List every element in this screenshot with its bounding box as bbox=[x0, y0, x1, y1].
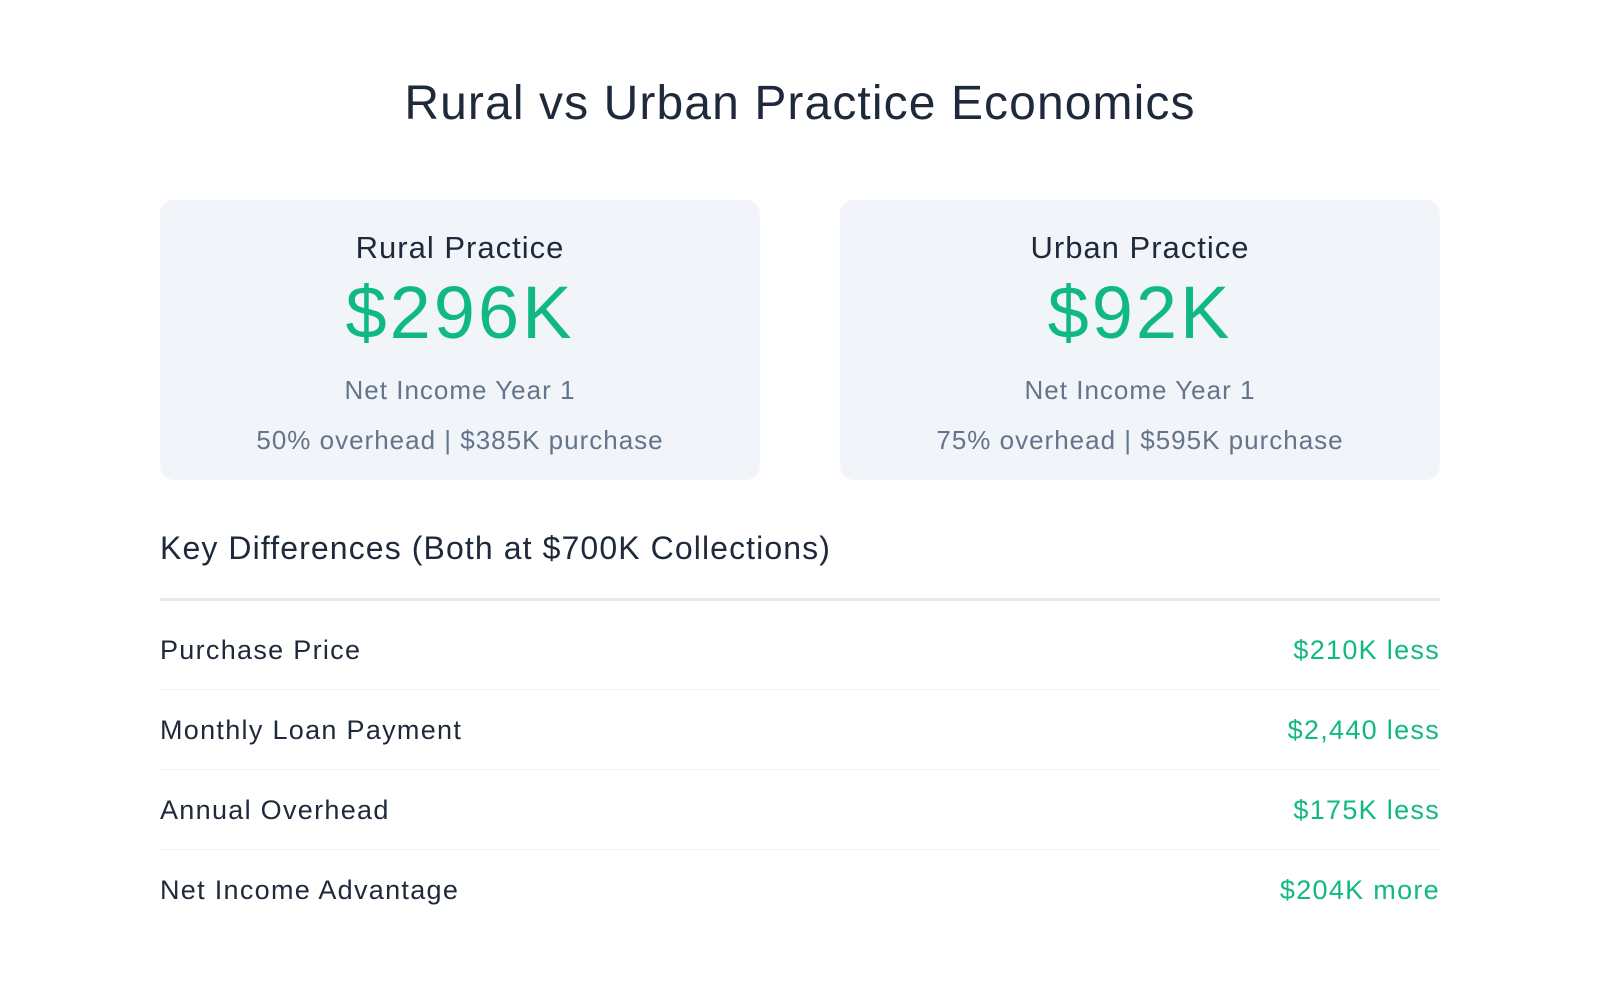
details: rural: 50% overhead | $385K purchase bbox=[256, 425, 664, 455]
row: purchase price: Purchase Price bbox=[160, 635, 361, 665]
panel: urban practice bbox=[840, 200, 1440, 480]
row: net income advantage: $204K more bbox=[1280, 875, 1440, 905]
row: purchase price bbox=[160, 635, 1440, 665]
row: monthly loan bbox=[160, 715, 1440, 745]
details: urban: 75% overhead | $595K purchase bbox=[936, 425, 1344, 455]
row: annual overhead bbox=[160, 795, 1440, 825]
section heading: Key Differences (Both at $700K Collections) bbox=[160, 530, 831, 566]
label: net income urban: Net Income Year 1 bbox=[1025, 375, 1255, 405]
title: Rural vs Urban Practice Economics bbox=[404, 77, 1196, 130]
row: net income advantage bbox=[160, 875, 1440, 905]
panel: rural practice bbox=[160, 200, 760, 480]
row: monthly loan: $2,440 less bbox=[1288, 715, 1440, 745]
row: annual overhead: Annual Overhead bbox=[160, 795, 390, 825]
row: purchase price: $210K less bbox=[1293, 635, 1440, 665]
card heading: rural: Rural Practice bbox=[356, 230, 564, 265]
big number: rural income: $296K bbox=[346, 271, 574, 354]
row: annual overhead: $175K less bbox=[1293, 795, 1440, 825]
row: monthly loan: Monthly Loan Payment bbox=[160, 715, 462, 745]
table: key differences bbox=[160, 635, 1440, 905]
card heading: urban: Urban Practice bbox=[1030, 230, 1250, 265]
row: net income advantage: Net Income Advantage bbox=[160, 875, 459, 905]
big number: urban income: $92K bbox=[1048, 271, 1232, 354]
label: net income: Net Income Year 1 bbox=[345, 375, 575, 405]
